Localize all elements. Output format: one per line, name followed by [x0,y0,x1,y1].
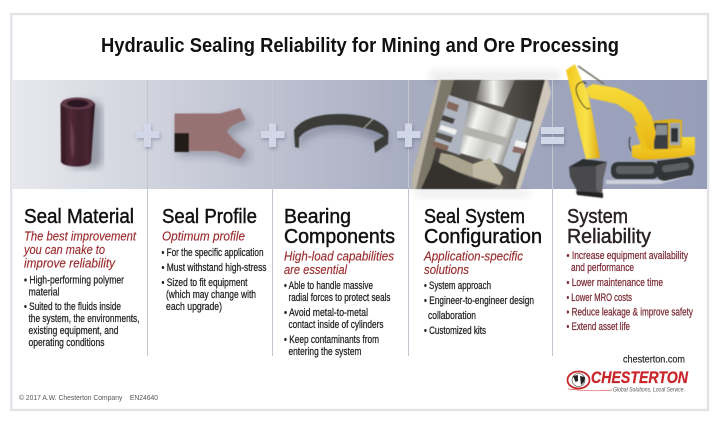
bullets: and performance [571,262,634,274]
bullets: entering the system [288,346,362,358]
excavator arm [566,64,600,159]
bullets: each upgrade) [166,301,222,313]
heading: Reliability [567,225,652,248]
wordmark: CHESTERTON [591,369,689,387]
subheading: solutions [424,262,469,277]
bullets: collaboration [428,310,476,322]
panel: system reliability [566,205,693,333]
column dividers [148,80,552,356]
bullets: • Lower MRO costs [566,292,632,304]
subheading: High-load capabilities [284,248,394,264]
bullets: existing equipment, and [28,325,118,337]
bullets: operating conditions [28,337,105,349]
heading: System [567,205,628,228]
bullets: • Must withstand high-stress [162,262,267,274]
title: Hydraulic Sealing Reliability for Mining and Ore Processing [101,35,619,57]
heading: Seal System [424,205,525,228]
excavator boom [586,84,656,150]
excavator ground shadow [606,176,690,184]
icon: seal system cutaway [412,80,551,189]
bullets: contact inside of cylinders [288,319,384,331]
heading: Seal Profile [162,205,257,228]
panel: bearing components [284,205,395,358]
bullets [162,247,267,313]
icon: seal profile [174,108,251,164]
subheading: are essential [284,262,348,277]
heading: Configuration [424,225,542,248]
bullets: • Customized kits [424,325,486,337]
bullets [566,250,693,333]
bullets: • Engineer-to-engineer design [424,295,534,307]
tagline: Global Solutions, Local Service. [613,388,685,394]
bullets [24,274,140,349]
bullets: material [28,286,60,298]
bullets: • Able to handle massive [284,280,373,292]
heading [567,205,652,248]
bullets: • Keep contaminants from [284,334,379,346]
heading: Bearing [284,205,351,228]
bullets: • Lower maintenance time [566,277,663,289]
plus signs and equals [136,124,565,149]
excavator cab [653,119,682,150]
bullets: • Sized to fit equipment [162,277,248,289]
bullets: (which may change with [166,289,256,301]
heading: Components [284,225,395,248]
subheading: Optimum profile [162,228,245,244]
subheading: The best improvement [24,228,137,244]
bullets: the system, the environments, [28,313,140,325]
excavator bucket [569,159,607,198]
bullets [284,280,391,358]
subheading [423,248,523,277]
subheading: improve reliability [24,256,116,270]
subheading: Application-specific [423,248,523,264]
heading [424,205,542,248]
copyright: © 2017 A.W. Chesterton Company EN24640 [19,393,158,402]
bullets: • For the specific application [162,247,264,259]
icon: bearing ring [294,114,388,153]
subheading [23,228,137,270]
subheading: you can make to [23,242,105,257]
bullets: • Suited to the fluids inside [24,301,121,313]
bullets: • High-performing polymer [24,274,124,286]
heading [284,205,395,248]
bullets [424,280,534,337]
heading: Seal Material [24,205,134,228]
excavator tracks [611,157,694,181]
panel: seal material [23,205,139,349]
icon: polymer cylinder [60,98,102,168]
bullets: • Extend asset life [566,321,630,333]
subheading [284,248,394,277]
image band [12,70,707,198]
bullets: • System approach [424,280,491,292]
panel: seal system configuration [423,205,542,337]
icon: excavator [566,64,695,198]
excavator body [632,137,695,160]
chesterton logo [568,369,689,394]
panel: seal profile [162,205,267,313]
website url: chesterton.com [623,354,685,366]
bullets: • Increase equipment availability [566,250,688,262]
bullets: • Avoid metal-to-metal [284,307,368,319]
icon: globe [568,372,612,391]
bullets: radial forces to protect seals [288,292,391,304]
